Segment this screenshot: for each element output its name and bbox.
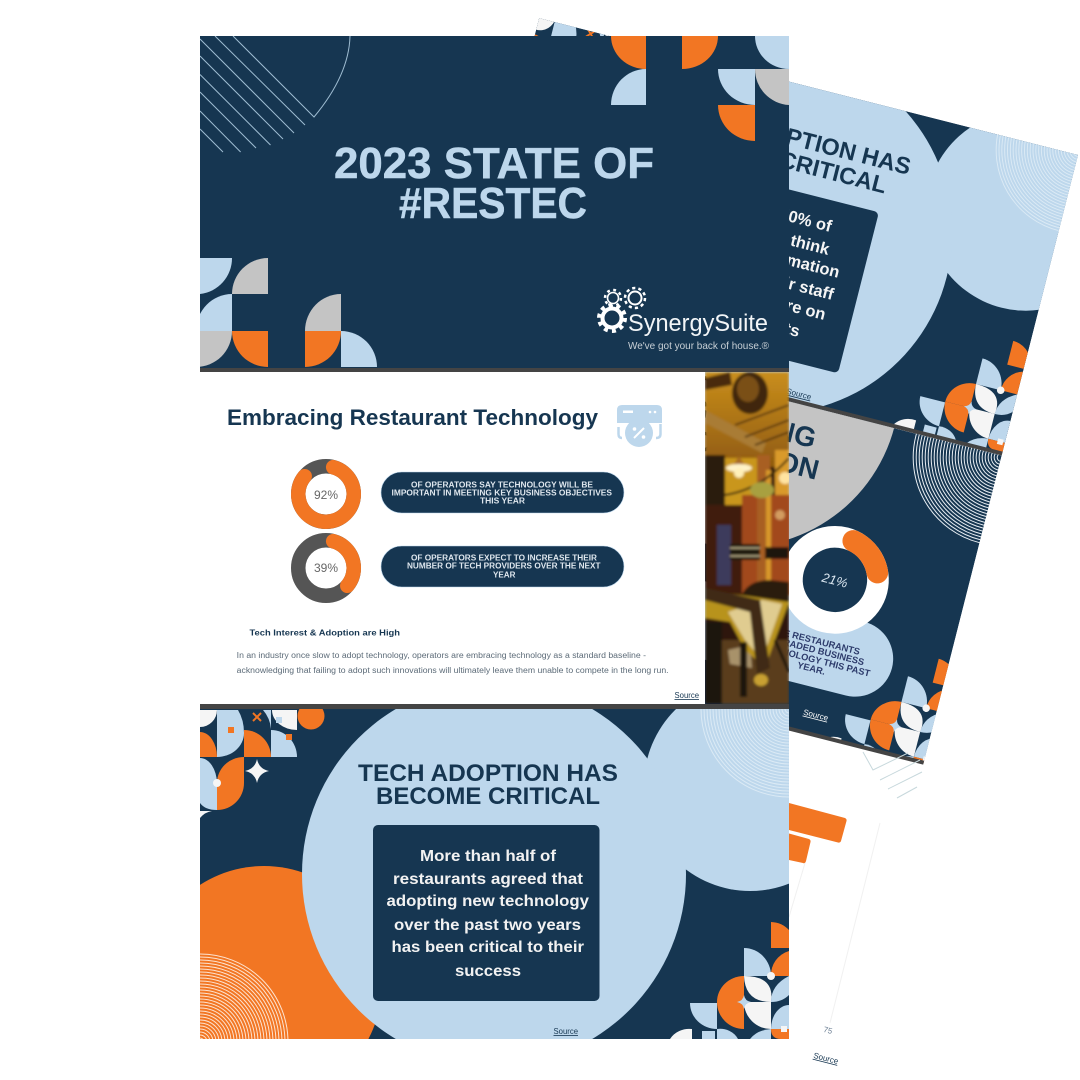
- source link: tilted slide two: Source: [802, 708, 830, 723]
- chart: 39% donut: [298, 540, 354, 596]
- heading: tilted upgrading: [705, 402, 819, 480]
- text: automation statistic: Nearly 50% of: [724, 192, 834, 236]
- chart: 21% donut: [783, 528, 887, 632]
- text: statement card: restaurants agreed that: [393, 871, 584, 888]
- heading: tilted tech adoption: BECOME CRITICAL: [670, 119, 889, 198]
- infographic: stacked slide deck: [200, 18, 1078, 1066]
- slide: title cover: [196, 36, 789, 368]
- callout: 39% statement: OF OPERATORS EXPECT TO INCREASE THEIR: [411, 553, 597, 562]
- back page: axis value: 75: [822, 1025, 834, 1036]
- text: statement card: over the past two years: [394, 917, 581, 934]
- heading: tilted tech adoption: TECH ADOPTION HAS: [665, 93, 914, 180]
- callout: restaurants upgraded pill: UPGRADED BUSINESS: [763, 632, 865, 667]
- callout: 92% statement: THIS YEAR: [480, 497, 525, 506]
- back page: source link: Source: [812, 1051, 840, 1066]
- callout: restaurants upgraded pill: TECHNOLOGY THIS PAST: [756, 640, 872, 679]
- chart: 92% donut: [298, 466, 354, 522]
- text: automation statistic: automation: [751, 242, 842, 282]
- body text: [237, 651, 669, 675]
- heading: Embracing Restaurant Technology: [227, 405, 599, 430]
- title: 2023 STATE OF: [334, 139, 654, 188]
- callout: 39% statement: YEAR: [493, 570, 516, 579]
- source link: Source: [674, 691, 700, 700]
- tiles: bottom-left quarter circles: [196, 258, 377, 367]
- slide: tech adoption has become critical: [200, 709, 789, 1039]
- text: automation statistic: [789, 210, 839, 336]
- heading: BECOME CRITICAL: [376, 783, 600, 810]
- source link: Source: [554, 1027, 579, 1036]
- source link: tilted slide one: Source: [785, 387, 813, 402]
- chart: 92% donut: 92%: [314, 488, 338, 502]
- title: #RESTEC: [399, 179, 587, 228]
- callout: restaurants upgraded pill: YEAR.: [796, 660, 826, 677]
- callout: 39% statement: [381, 546, 624, 587]
- title: [335, 147, 653, 219]
- slide: upgraded technology (tilted): [705, 380, 1002, 763]
- callout: 92% statement: [381, 472, 624, 513]
- logo: SynergySuite: [599, 288, 769, 352]
- body text: acknowledging that failing to adopt such innovations will ultimately leave them unable to compete in the long run.: [237, 666, 669, 675]
- back page: faint chart lines: [789, 823, 880, 1023]
- slide: embracing restaurant technology: [200, 372, 705, 704]
- text: automation statistic: will help their staff: [690, 250, 836, 304]
- text: statement card: has been critical to their: [392, 939, 584, 956]
- text: statement card: success: [455, 963, 521, 980]
- back page: faint line pattern: [863, 752, 922, 798]
- logo: SynergySuite: SynergySuite: [628, 310, 768, 337]
- text: automation statistic: guests: [746, 310, 802, 341]
- callout: 92% statement: OF OPERATORS SAY TECHNOLOGY WILL BE: [411, 480, 594, 489]
- decorative line pattern: top-left: [200, 36, 350, 152]
- heading: TECH ADOPTION HAS: [358, 760, 618, 787]
- text: statement card: [386, 848, 589, 980]
- callout: restaurants upgraded pill: [705, 581, 894, 697]
- photo: restaurant interior: [705, 372, 791, 704]
- heading: tilted tech adoption: [789, 128, 910, 194]
- back page: orange bars: [789, 803, 847, 863]
- tiles: top-right quarter circles: [611, 36, 789, 141]
- icon: browser with percent badge: [617, 405, 662, 447]
- chart: 21% donut: 21%: [819, 570, 849, 591]
- slide: tech adoption (tilted): [534, 18, 1078, 454]
- callout: 39% statement: NUMBER OF TECH PROVIDERS OVER THE NEXT: [407, 562, 601, 571]
- back page: tilted slide deck: [534, 18, 1078, 765]
- callout: restaurants upgraded pill: 21% OF THE RESTAURANTS: [735, 616, 861, 657]
- body text: In an industry once slow to adopt technology, operators are embracing technology as a standard baseline -: [237, 651, 646, 660]
- text: automation statistic: focus more on: [713, 278, 828, 324]
- text: statement card: More than half of: [420, 848, 557, 865]
- chart: 39% donut: 39%: [314, 561, 338, 575]
- heading: [358, 764, 617, 804]
- subheading: Tech Interest & Adoption are High: [250, 628, 400, 638]
- heading: tilted upgrading: UPGRADING: [646, 382, 820, 454]
- logo: SynergySuite: We've got your back of house.®: [628, 340, 769, 352]
- text: statement card: adopting new technology: [386, 893, 589, 910]
- callout: 92% statement: IMPORTANT IN MEETING KEY BUSINESS OBJECTIVES: [392, 489, 613, 498]
- heading: tilted upgrading: ADOPTION: [671, 419, 822, 486]
- text: automation statistic: operators think: [710, 212, 832, 259]
